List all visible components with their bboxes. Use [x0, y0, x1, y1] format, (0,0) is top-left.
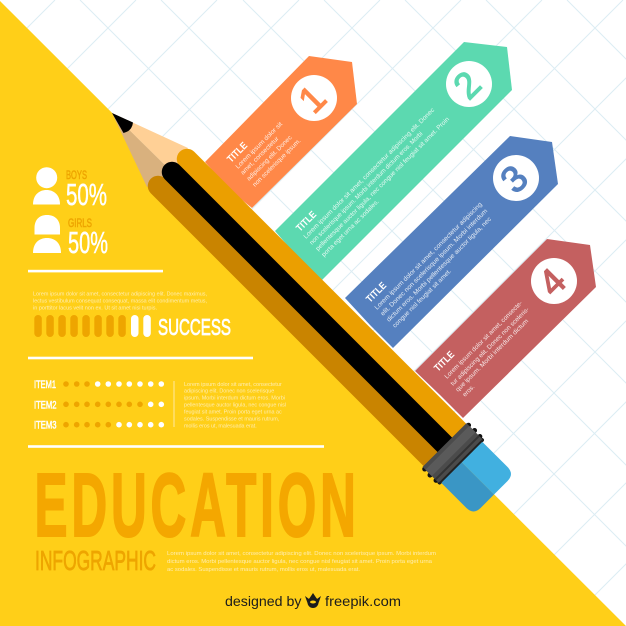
banner 1 title: TITLE [225, 140, 250, 165]
banner 3 text: congue nisl feugiat sit amet. [391, 268, 453, 329]
number 1 badge: 1 [290, 77, 334, 121]
metal ferrule [420, 421, 486, 487]
banner 2 text: porta eget urna ac sodales. [320, 198, 381, 258]
banner 1: orange arrow [205, 56, 357, 208]
footer description text: dictum eros. Morbi pellentesque auctor ligula, nec congue nisl feugiat sit amet. Proin porta eget urna [167, 559, 433, 565]
banner 3 text: elit. Donec non scelerisque ipsum. Morbi interdum [379, 208, 489, 317]
boys label: BOYS [66, 170, 87, 182]
footer description text: ac sodales. Suspendisse et mauris rutrum, mollis eros ut, malesuada erat. [167, 567, 360, 573]
title: education: EDUCATION [34, 455, 360, 556]
intro text block: in porttitor lacus velit non ex. Ut sit amet nisi turpis. [33, 306, 157, 312]
item 1 row: ITEM1 [34, 379, 56, 391]
footer description text [167, 551, 436, 573]
icon: girl [33, 215, 61, 253]
item ratings [34, 379, 164, 432]
banner 2 text: Lorem ipsum dolor sit amet, consectetur adipiscing elit. Donec [302, 107, 436, 240]
banner 1 text: adipiscing elit. Donec [245, 134, 294, 182]
banner 2 text: non scelerisque ipsum. Morbi interdum dictum eros. Morbi [308, 130, 424, 246]
item description text [184, 382, 286, 429]
item description text: mollis eros ut, malesuada erat. [184, 423, 257, 429]
freepik credit: designed by [225, 593, 302, 609]
banner 1 text: amet, consectetur [239, 135, 280, 176]
banner 3 text: Lorem ipsum dolor sit amet, consectetur adipiscing [373, 201, 484, 311]
freepik credit [225, 593, 401, 609]
banner 4 text: Lorem ipsum dolor sit amet, consecte- [443, 300, 524, 380]
subtitle: infographic: INFOGRAPHIC [35, 545, 156, 576]
boys percentage: 50% [66, 177, 107, 212]
banner 1 text: Lorem ipsum dolor sit [234, 121, 284, 170]
item 3 row: ITEM3 [34, 420, 56, 432]
number 3 badge: 3 [492, 157, 536, 201]
banner 4 text: eros. [461, 383, 476, 398]
pencil lead [112, 113, 133, 133]
icon: boy [33, 167, 60, 204]
banner 4: red arrow [415, 239, 596, 418]
banner 1 text: non scelerisque ipsum. [251, 137, 303, 188]
banner 1 text [234, 121, 303, 188]
intro text block: lectus vestibulum consequat consequat, massa elit condimentum metus, [33, 298, 207, 304]
item description text: adipiscing elit. Donec non scelerisque [184, 389, 274, 395]
pencil wood tip [112, 113, 188, 187]
girls label: GIRLS [68, 216, 92, 230]
banner 3 title: TITLE [364, 280, 389, 305]
freepik credit: freepik.com [325, 593, 401, 609]
footer description text: Lorem ipsum dolor sit amet, consectetur adipiscing elit. Donec non scelerisque ipsum. Morbi interdum [167, 551, 436, 557]
banner 2: teal arrow [275, 42, 512, 280]
item description text: Lorem ipsum dolor sit amet, consectetur [184, 382, 282, 388]
item description text: pellentesque auctor ligula, nec congue nisl [184, 403, 286, 409]
item description text: ipsum. Morbi interdum dictum eros. Morbi [184, 396, 285, 402]
number 2 badge: 2 [445, 63, 489, 107]
success label: SUCCESS [158, 314, 231, 340]
intro text block: Lorem ipsum dolor sit amet, consectetur adipiscing elit. Donec maximus, [33, 292, 207, 298]
banner 4 text: tur adipiscing elit. Donec non sceleris- [449, 306, 531, 387]
boys statistic [33, 167, 107, 212]
icon: freepik crown [305, 593, 321, 608]
banner 4 text: que ipsum. Morbi interdum dictum [454, 318, 530, 393]
banner 3 text: dictum eros. Morbi pellentesque auctor ligula, nec [385, 216, 493, 323]
eraser [440, 440, 515, 515]
girls statistic [33, 215, 108, 260]
intro text block [33, 292, 207, 312]
girls percentage: 50% [68, 225, 108, 260]
success progress bar [34, 314, 231, 340]
item description text: sodales. Suspendisse et mauris rutrum, [184, 416, 280, 422]
item description text: feugiat sit amet. Proin porta eget urna ac [184, 409, 282, 415]
banner 4 title: TITLE [432, 349, 457, 374]
item 2 row: ITEM2 [34, 399, 56, 411]
pencil body stripes [158, 159, 462, 463]
number 4 badge: 4 [530, 260, 574, 304]
pencil [112, 113, 515, 515]
banner 2 text: pellentesque auctor ligula, nec congue nisl feugiat sit amet. Proin [314, 116, 451, 252]
banner 2 title: TITLE [294, 209, 319, 234]
banner 3: blue arrow [345, 136, 558, 348]
